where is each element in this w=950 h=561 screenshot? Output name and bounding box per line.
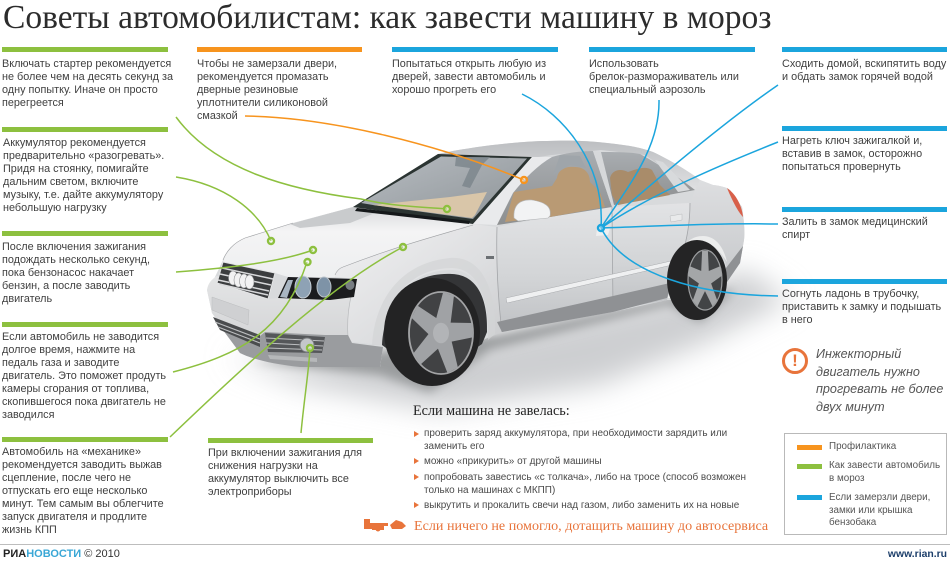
legend: frozen doors: Если замерзли двери, (829, 492, 930, 503)
hood (223, 207, 473, 277)
callout: injector engine: Инжекторный (816, 347, 901, 361)
legend (784, 433, 947, 535)
legend: how to start: в мороз (829, 473, 865, 484)
tip: electronics: При включении зажигания для (208, 447, 362, 459)
mirror (514, 200, 550, 221)
dashboard (373, 192, 487, 218)
tip: door seals (197, 47, 362, 122)
tip: defroster: специальный аэрозоль (589, 84, 706, 96)
fender to bumper seam (348, 279, 357, 338)
legend: frozen doors: бензобака (829, 517, 876, 528)
fog lamp (300, 338, 314, 352)
site url: www.rian.ru (888, 549, 947, 560)
list: только на машинах с МКПП) (424, 485, 555, 496)
fender arch shade (372, 258, 495, 345)
callout: injector engine: двух минут (816, 400, 885, 414)
tip: alcohol (782, 207, 947, 241)
tip: warm breath: Согнуть ладонь в трубочку, (782, 288, 919, 300)
lower grille (213, 317, 325, 362)
list: заменить его (424, 441, 484, 452)
list: проверить заряд аккумулятора, при необходимости зарядить или (424, 428, 727, 439)
number plate area (212, 297, 249, 325)
conclusion: Если ничего не помогло, дотащить машину до автосервиса (414, 518, 768, 534)
roof (438, 141, 700, 190)
tip: ignition: двигатель (2, 293, 52, 305)
blue leader: key fob (601, 100, 659, 228)
tip: gas pedal: скопившегося пока двигатель не (2, 396, 166, 408)
tip: gas pedal: заводился (2, 409, 54, 421)
rear door (612, 203, 690, 310)
tip: manual gearbox: минут. Тем самым вы облегчите (2, 498, 164, 510)
tip: gas pedal: камеры сгорания от топлива, (2, 383, 149, 395)
front wheel (382, 274, 487, 386)
tip: door seals: Чтобы не замерзали двери, (197, 58, 337, 70)
tip: electronics: аккумулятор выключить все (208, 473, 349, 485)
headlight (278, 276, 357, 300)
footer (0, 544, 950, 561)
tip: warm breath: приставить к замку и подышать (782, 301, 941, 313)
list: выкрутить и прокалить свечи над газом, либо заменить их на новые (424, 500, 739, 511)
legend: how to start: Как завести автомобиль (829, 460, 940, 471)
tip: ignition: бензин, а после заводить (2, 280, 130, 292)
heading: Если машина не завелась: (413, 403, 570, 419)
tip: battery: небольшую нагрузку (3, 202, 107, 214)
tip: warm breath: в него (782, 314, 813, 326)
rear side window (601, 152, 695, 205)
tip: door seals: смазкой (197, 110, 238, 122)
tip: battery (2, 127, 168, 214)
tip: warm up via other door (392, 47, 558, 96)
list (414, 428, 746, 511)
tip: manual gearbox: сцепление, после чего не (2, 472, 131, 484)
callout: injector engine (782, 347, 943, 414)
tip: hot water (782, 47, 947, 83)
green leader: electronics (301, 348, 310, 433)
blue leader: heated key (601, 142, 778, 228)
front fender (335, 224, 502, 345)
blue leader: breath (601, 228, 778, 296)
side marker (486, 256, 494, 259)
tip: heated key: попытаться провернуть (782, 161, 901, 173)
car (207, 141, 790, 410)
tip: manual gearbox: запуск двигателя и продлите (2, 511, 147, 523)
tail light (727, 188, 743, 217)
tip: manual gearbox: жизнь КПП (2, 524, 57, 536)
windshield (353, 154, 532, 224)
tip: ignition: пока бензонасос накачает (2, 267, 134, 279)
icon: warning (782, 348, 808, 374)
hood shade (290, 207, 380, 228)
c-pillar (655, 160, 690, 192)
tip: alcohol: спирт (782, 229, 810, 241)
rear seats (610, 168, 670, 205)
blue leader: hot water (601, 85, 778, 228)
green leader: gas pedal (173, 262, 307, 372)
green leader: manual (170, 247, 403, 437)
tip: gas pedal: педаль газа и заводите (2, 357, 119, 369)
lower bumper (214, 318, 383, 367)
tip: battery: предварительно «разогревать». (3, 150, 164, 162)
front side window (497, 151, 612, 225)
legend: frozen doors (797, 492, 930, 528)
tip: starter: Включать стартер рекомендуется (2, 58, 171, 70)
tip: battery: Придя на стоянку, помигайте (3, 163, 149, 175)
tip: starter: перегреется (2, 97, 64, 109)
sill (497, 278, 672, 332)
logo: РИАНОВОСТИ © 2010 (3, 548, 120, 560)
title: Советы автомобилистам: как завести машину в мороз (3, 0, 772, 36)
tip: gas pedal (2, 322, 168, 421)
tip: defroster (589, 47, 755, 96)
tip: alcohol: Залить в замок медицинский (782, 216, 928, 228)
tip: defroster: брелок-размораживатель или (589, 71, 739, 83)
tip: electronics (208, 438, 373, 498)
leader lines (170, 85, 778, 437)
tip: defroster: Использовать (589, 58, 659, 70)
tip: ignition: После включения зажигания (2, 241, 146, 253)
tip: hot water: Сходить домой, вскипятить воду (782, 58, 946, 70)
tip: heated key: Нагреть ключ зажигалкой и, (782, 135, 922, 147)
tip: electronics: электроприборы (208, 486, 292, 498)
callout: injector engine: двигатель нужно (816, 365, 920, 379)
tip: starter: одну попытку. Иначе он просто (2, 84, 158, 96)
rear lower valance (725, 246, 743, 285)
tip: battery: музыку, т.е. дайте аккумулятору (3, 189, 163, 201)
icon: tow truck (364, 519, 406, 532)
tip: manual gearbox: Автомобиль на «механике» (2, 446, 141, 458)
tip: door seals: уплотнители силиконовой (197, 97, 328, 109)
tip: manual gearbox: отпускать его еще несколько (2, 485, 147, 497)
grille (217, 262, 275, 299)
callout: injector engine: прогревать не более (816, 382, 943, 396)
leader dots (268, 177, 604, 351)
tip: hot water: и обдать замок горячей водой (782, 71, 933, 83)
tip: gas pedal: двигатель. Это поможет продуть (2, 370, 166, 382)
rear arch flare (667, 236, 727, 298)
legend: how to start (797, 460, 940, 484)
panel: if the car did not start (364, 403, 768, 534)
blue leader: alcohol (601, 224, 778, 228)
rub strip (506, 261, 672, 303)
front bumper (207, 276, 383, 367)
list: можно «прикурить» от другой машины (424, 456, 602, 467)
tip: manual gearbox: рекомендуется заводить выжав (2, 459, 162, 471)
tip: gas pedal: долгое время, нажмите на (2, 344, 135, 356)
tip: battery: дальним светом, включите (3, 176, 138, 188)
tip: door seals: дверные резиновые (197, 84, 298, 96)
tip: ignition: подождать несколько секунд, (2, 254, 150, 266)
b-pillar (593, 151, 621, 207)
icon: warning: ! (792, 351, 798, 370)
green leader: ignition (176, 250, 313, 272)
tip: door seals: рекомендуется промазать (197, 71, 329, 83)
body base (207, 141, 744, 367)
tip: battery: Аккумулятор рекомендуется (3, 137, 146, 149)
green leader: starter (176, 117, 447, 209)
green leader: battery (176, 177, 271, 241)
tip: starter (2, 47, 174, 109)
front seats (505, 155, 605, 222)
ground shadow (225, 270, 790, 410)
hood crease (223, 223, 473, 275)
tip: warm up via other door: Попытаться открыть любую из (392, 58, 546, 70)
tip: ignition (2, 231, 168, 305)
tip: warm breath (782, 279, 947, 326)
a-pillar (473, 157, 552, 225)
rear view mirror (455, 157, 490, 188)
legend: prevention (797, 441, 896, 452)
tip: heated key (782, 126, 947, 173)
rear quarter (667, 180, 744, 296)
tip: electronics: снижения нагрузки на (208, 460, 318, 472)
tip: gas pedal: Если автомобиль не заводится (2, 331, 159, 343)
legend: prevention: Профилактика (829, 441, 896, 452)
front door (497, 207, 613, 332)
rear wheel (667, 240, 727, 320)
wipers (355, 208, 470, 224)
tip: starter: не более чем на десять секунд за (2, 71, 173, 83)
orange leader (245, 116, 524, 180)
tip: warm up via other door: дверей, завести автомобиль и (392, 71, 546, 83)
list: попробовать завестись «с толкача», либо на тросе (способ возможен (424, 472, 746, 483)
door handles (670, 214, 682, 222)
legend: frozen doors: замки или крышка (829, 505, 913, 516)
blue leader: open door (522, 94, 601, 228)
tip: heated key: вставив в замок, осторожно (782, 148, 922, 160)
tip: warm up via other door: хорошо прогреть его (392, 84, 496, 96)
door seams and trim (497, 203, 690, 332)
tip: manual gearbox (2, 437, 168, 536)
